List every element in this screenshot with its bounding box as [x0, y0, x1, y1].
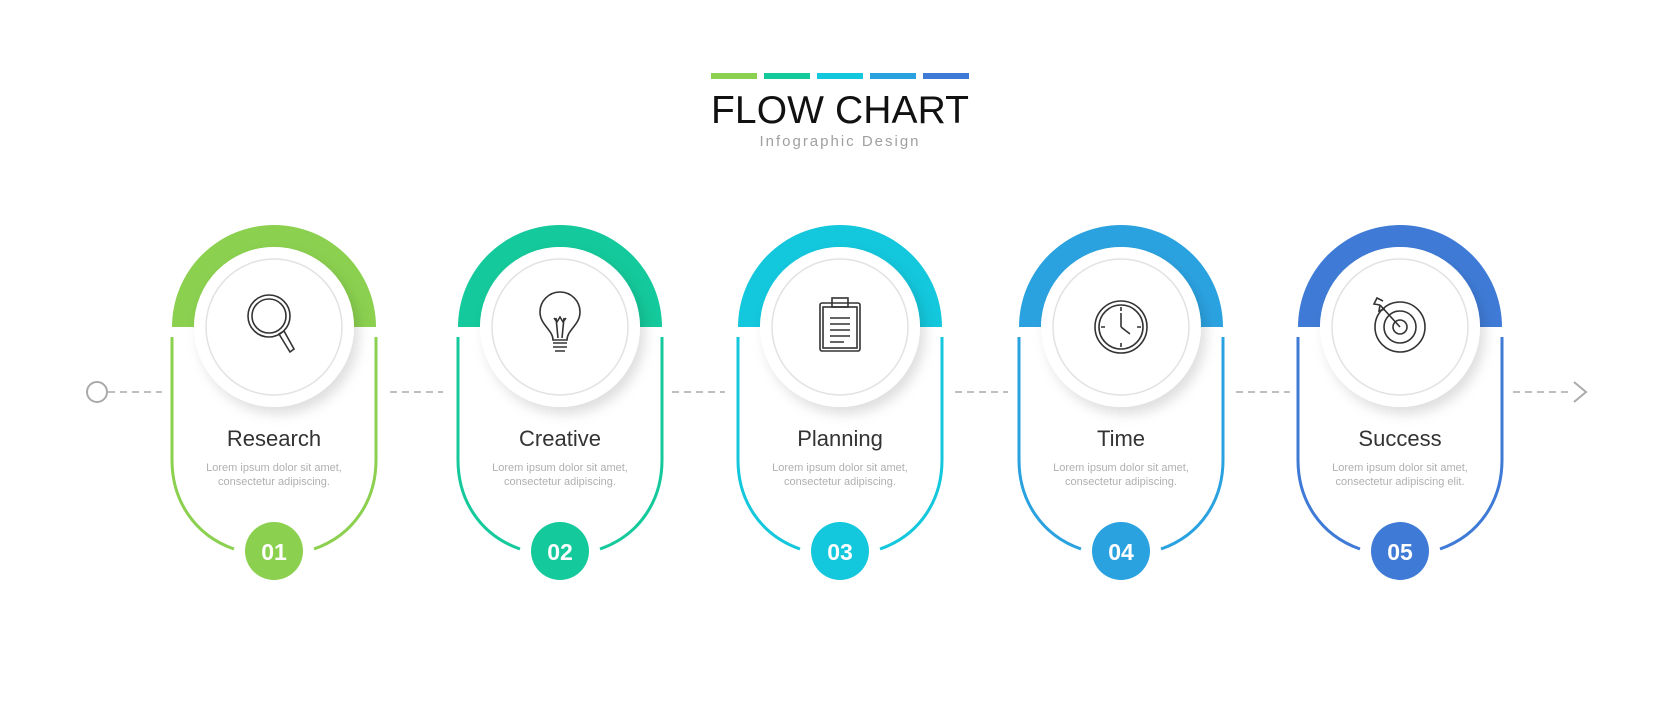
- step 3: Planning: consectetur adipiscing.: [784, 476, 896, 488]
- color bars: [711, 73, 969, 79]
- timeline dashed connector: [87, 382, 1586, 402]
- step 4: Time: [1019, 225, 1223, 580]
- step 4: Time: Lorem ipsum dolor sit amet,: [1053, 462, 1189, 474]
- step 5: Success: 05: [1387, 539, 1413, 565]
- icon: bulb: [540, 292, 580, 351]
- step 3: Planning: Planning: [797, 426, 883, 451]
- icon: magnifier: [248, 295, 294, 352]
- step 5: Success: Success: [1358, 426, 1442, 451]
- step 2: Creative: Lorem ipsum dolor sit amet,: [492, 462, 628, 474]
- subtitle: Infographic Design: [759, 133, 921, 150]
- step 1: Research: Lorem ipsum dolor sit amet,: [206, 462, 342, 474]
- step 2: Creative: consectetur adipiscing.: [504, 476, 616, 488]
- step 5: Success: [1298, 225, 1502, 580]
- step 3: Planning: 03: [827, 539, 853, 565]
- step 3: Planning: [738, 225, 942, 580]
- icon: target: [1374, 298, 1425, 352]
- step 4: Time: consectetur adipiscing.: [1065, 476, 1177, 488]
- step 1: Research: 01: [261, 539, 287, 565]
- step 1: Research: Research: [227, 426, 321, 451]
- step 2: Creative: Creative: [519, 426, 601, 451]
- step 4: Time: Time: [1097, 426, 1145, 451]
- title block: [711, 73, 969, 150]
- title: FLOW CHART: [711, 89, 969, 132]
- step 2: Creative: 02: [547, 539, 573, 565]
- step 1: Research: consectetur adipiscing.: [218, 476, 330, 488]
- step 5: Success: Lorem ipsum dolor sit amet,: [1332, 462, 1468, 474]
- step 5: Success: consectetur adipiscing elit.: [1335, 476, 1465, 488]
- icon: clock: [1095, 301, 1147, 353]
- step 2: Creative: [458, 225, 662, 580]
- step 3: Planning: Lorem ipsum dolor sit amet,: [772, 462, 908, 474]
- step 1: Research: [172, 225, 376, 580]
- step 4: Time: 04: [1108, 539, 1134, 565]
- icon: clipboard: [820, 298, 860, 351]
- arrow head: [1574, 382, 1586, 402]
